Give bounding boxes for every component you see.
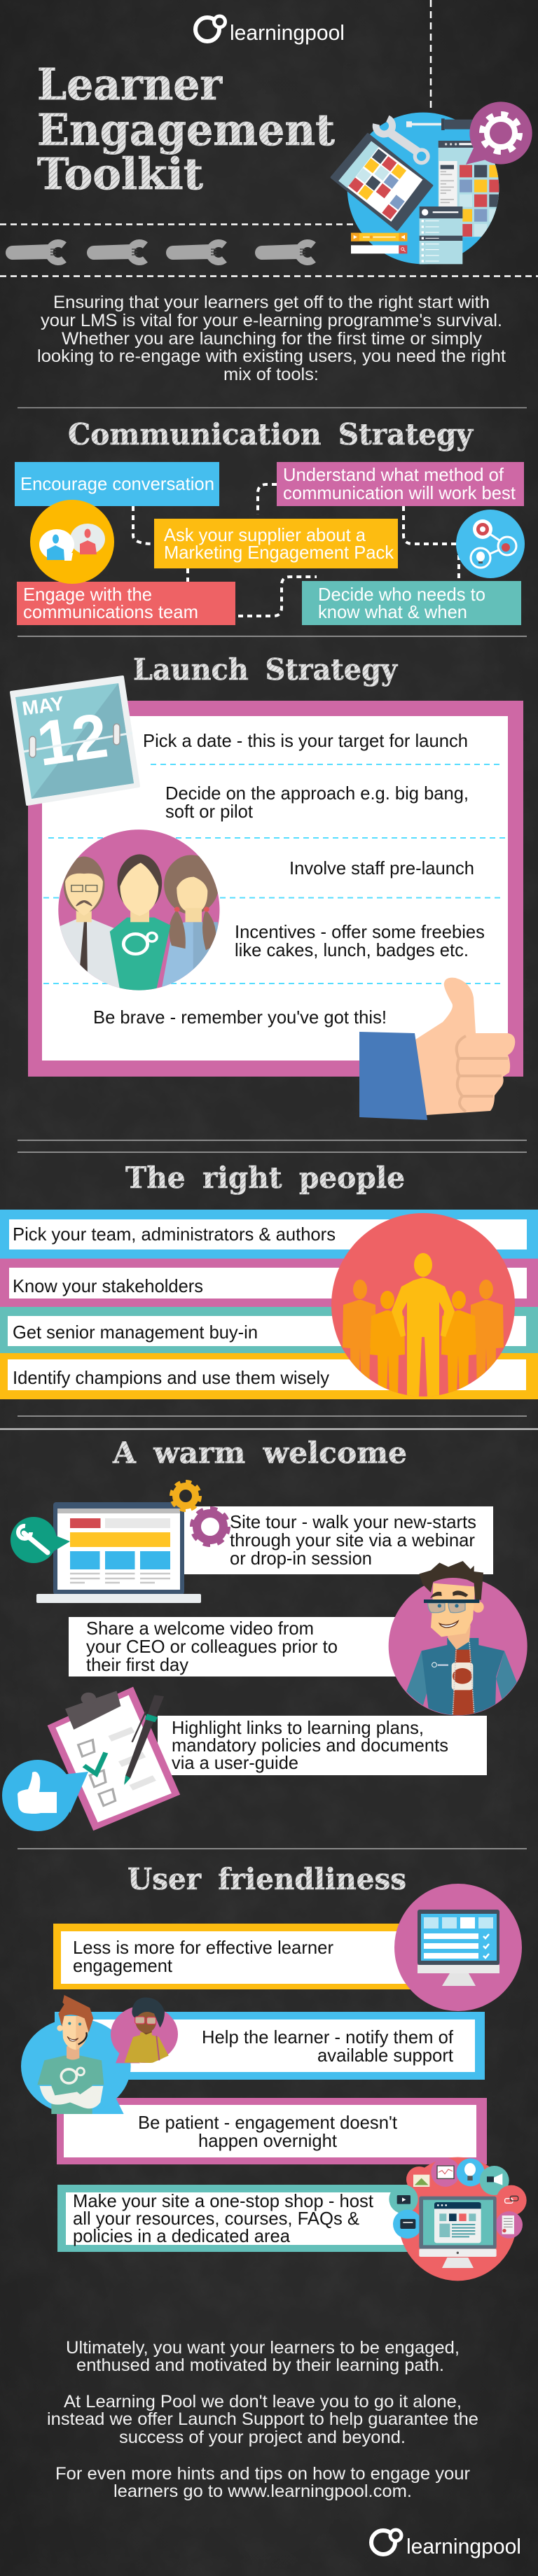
- box: engage with communications team: [17, 582, 235, 625]
- panel: the right people: [0, 1161, 538, 1399]
- heading: user friendliness: User friendliness: [127, 1862, 406, 1896]
- logo: learningpool header: [195, 16, 345, 45]
- panel: launch strategy: [11, 652, 523, 1120]
- icons: row of wrenches: [6, 244, 313, 262]
- logo: learningpool footer: [371, 2530, 521, 2558]
- icon: network of ideas: [456, 510, 525, 578]
- icon: search box: [351, 245, 407, 253]
- icon: tablet: [331, 134, 432, 230]
- logo: learningpool header: learningpool: [230, 20, 345, 45]
- connectors: dotted lines: [133, 484, 459, 616]
- icon: yellow gear: [172, 1482, 200, 1510]
- item: user guide links: mandatory policies and documents: [172, 1735, 448, 1756]
- title: Toolkit: [37, 148, 203, 200]
- title: Learner: [37, 59, 223, 110]
- item: be brave: Be brave - remember you've got this!: [93, 1007, 387, 1028]
- item: site tour: Site tour - walk your new-starts: [230, 1511, 476, 1532]
- heading: communication strategy: Communication Strategy: [68, 417, 474, 451]
- item: welcome video: their first day: [86, 1654, 188, 1675]
- box: understand method: [277, 462, 524, 506]
- icon: purple gear: [192, 1509, 228, 1544]
- item: decide approach: [165, 783, 469, 822]
- icon: calendar may 12: MAY: [21, 692, 66, 720]
- item: help the learner: [55, 2012, 485, 2080]
- icon: conversation people: [30, 500, 114, 584]
- item: decide approach: Decide on the approach e.g. big bang,: [165, 783, 469, 804]
- icon: calendar may 12: [11, 677, 139, 804]
- woman in purple bubble: [111, 1997, 178, 2063]
- logo: learningpool footer: learningpool: [406, 2534, 521, 2558]
- intro text: [37, 293, 506, 384]
- man with tie: [58, 857, 122, 991]
- box: engage with communications team: Engage with the: [23, 584, 152, 605]
- box: decide who needs to know: [302, 581, 521, 625]
- closing text: [47, 2338, 478, 2501]
- item: incentives: like cakes, lunch, badges etc.: [235, 939, 469, 960]
- item: one-stop shop: policies in a dedicated area: [73, 2225, 291, 2246]
- item: be patient: Be patient - engagement doesn't: [138, 2112, 398, 2133]
- icon: presenter character: [389, 1561, 527, 1718]
- intro text: looking to re-engage with existing users, you need the right: [37, 346, 506, 366]
- item: help the learner: available support: [317, 2045, 454, 2066]
- bar: identify champions: Identify champions and use them wisely: [13, 1367, 329, 1388]
- item: involve staff: Involve staff pre-launch: [289, 858, 474, 878]
- item: one-stop shop: [57, 2185, 412, 2252]
- icon: thumbs up hand: [359, 978, 515, 1120]
- title: Engagement: [37, 104, 335, 155]
- item: be patient: [57, 2098, 487, 2164]
- item: user guide links: [158, 1716, 487, 1775]
- item: less is more: engagement: [73, 1955, 173, 1976]
- hero illustration: toolkit on blue circle: [331, 102, 532, 264]
- item: welcome video: [69, 1617, 398, 1676]
- item: help the learner: Help the learner - notify them of: [202, 2026, 454, 2047]
- icon: monitor with checklist: [394, 1884, 522, 2011]
- item: welcome video: Share a welcome video from: [86, 1618, 314, 1639]
- item: be patient: happen overnight: [198, 2130, 338, 2151]
- heading: a warm welcome: A warm welcome: [112, 1436, 407, 1470]
- item: incentives: Incentives - offer some freebies: [235, 921, 485, 942]
- item: one-stop shop: Make your site a one-stop shop - host: [73, 2190, 374, 2211]
- icon: clipboard checklist: [48, 1687, 180, 1830]
- box: understand method: communication will work best: [283, 482, 516, 503]
- closing text: Ultimately, you want your learners to be engaged,: [66, 2338, 460, 2358]
- intro text: Whether you are launching for the first time or simply: [62, 329, 483, 349]
- item: welcome video: your CEO or colleagues prior to: [86, 1636, 338, 1657]
- item: site tour: [184, 1506, 493, 1574]
- icon: gear speech bubble: [466, 102, 532, 164]
- bar: know your stakeholders: Know your stakeholders: [13, 1275, 203, 1296]
- man in green shirt: [110, 854, 170, 991]
- item: site tour: through your site via a webinar: [230, 1530, 475, 1550]
- icon: website screen: [439, 141, 499, 237]
- box: decide who needs to know: Decide who needs to: [318, 584, 485, 605]
- panel: user friendliness: [21, 1862, 527, 2281]
- closing text: success of your project and beyond.: [119, 2428, 406, 2447]
- closing text: For even more hints and tips on how to engage your: [55, 2464, 470, 2484]
- icon: screwdriver: [406, 118, 474, 130]
- icon: spanner: [376, 118, 428, 163]
- icon: thumbs up bubble: [2, 1760, 88, 1831]
- box: decide who needs to know: know what & when: [318, 601, 467, 622]
- item: pick a date: Pick a date - this is your target for launch: [143, 730, 468, 751]
- closing text: instead we offer Launch Support to help guarantee the: [47, 2409, 478, 2429]
- item: less is more: [53, 1924, 412, 1989]
- item: less is more: Less is more for effective learner: [73, 1937, 333, 1958]
- panel: communication strategy: [15, 417, 525, 625]
- box: encourage conversation: Encourage conversation: [20, 473, 214, 494]
- icon: team of people in red circle: [331, 1213, 515, 1396]
- icon: support man and learner woman: [21, 1995, 178, 2114]
- bar: identify champions: [0, 1353, 538, 1399]
- bar: senior management: [0, 1307, 538, 1353]
- closing text: learners go to www.learningpool.com.: [113, 2482, 412, 2501]
- heading: launch strategy: Launch Strategy: [133, 652, 399, 687]
- woman: [161, 855, 219, 991]
- icon: three staff members: [58, 830, 219, 991]
- icon: list panel: [420, 206, 462, 264]
- box: engage with communications team: communications team: [23, 601, 198, 622]
- box: marketing engagement pack: Marketing Engagement Pack: [164, 542, 394, 563]
- bar: pick your team: Pick your team, administrators & authors: [13, 1224, 336, 1245]
- box: understand method: Understand what method of: [283, 464, 504, 485]
- bar: pick your team: [0, 1210, 538, 1259]
- box: encourage conversation: [15, 462, 219, 506]
- icon: laptop: [36, 1502, 201, 1603]
- item: incentives: [235, 921, 485, 960]
- icon: green wrench bubble: [11, 1517, 70, 1563]
- item: decide approach: soft or pilot: [165, 801, 254, 822]
- intro text: your LMS is vital for your e-learning programme's survival.: [41, 311, 502, 330]
- intro text: Ensuring that your learners get off to the right start with: [53, 293, 490, 312]
- closing text: enthused and motivated by their learning path.: [76, 2356, 444, 2375]
- frame: purple border with white card: [28, 701, 523, 1077]
- bar: know your stakeholders: [0, 1259, 538, 1307]
- item: one-stop shop: all your resources, courses, FAQs &: [73, 2208, 359, 2229]
- intro text: mix of tools:: [223, 365, 319, 384]
- closing text: At Learning Pool we don't leave you to go it alone,: [64, 2392, 462, 2412]
- icon: media player bar: [351, 233, 407, 241]
- box: marketing engagement pack: [154, 519, 398, 568]
- bar: senior management: Get senior management buy-in: [13, 1322, 258, 1343]
- panel: a warm welcome: [2, 1436, 527, 1831]
- icon: monitor with resource bubbles: [389, 2157, 527, 2281]
- title: [37, 59, 335, 200]
- item: user guide links: via a user-guide: [172, 1752, 298, 1773]
- heading: the right people: The right people: [125, 1161, 405, 1195]
- box: marketing engagement pack: Ask your supplier about a: [164, 524, 366, 545]
- item: site tour: or drop-in session: [230, 1548, 372, 1569]
- icon: calendar may 12: 12: [33, 701, 112, 780]
- item: user guide links: Highlight links to learning plans,: [172, 1717, 424, 1738]
- man in blue bubble: [21, 1995, 131, 2114]
